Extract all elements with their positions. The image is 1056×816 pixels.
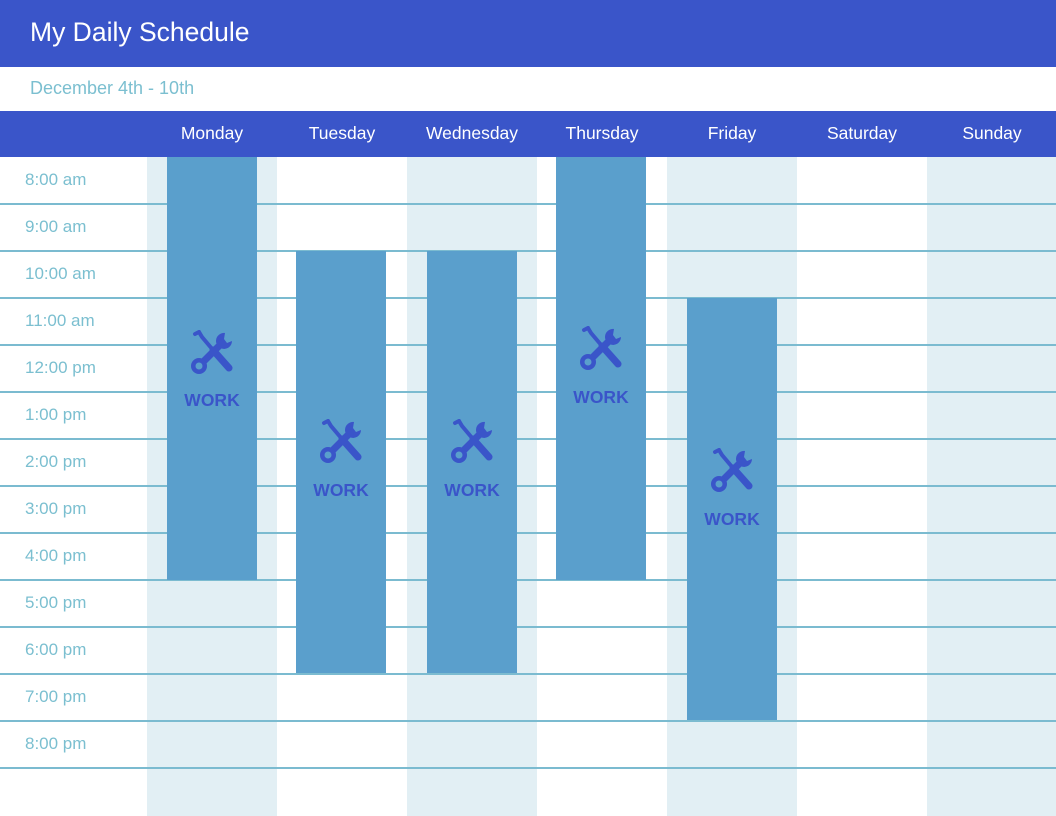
bar: Friday work: WORK xyxy=(704,509,760,529)
icon: tools xyxy=(320,419,362,463)
time labels: 4:00 pm xyxy=(25,546,86,565)
day labels: Wednesday xyxy=(426,123,518,143)
icon: tools xyxy=(580,326,622,370)
day labels xyxy=(181,123,1022,143)
bar: Monday work: WORK xyxy=(184,390,240,410)
time labels: 10:00 am xyxy=(25,264,96,283)
icon: tools xyxy=(191,330,232,374)
bar: Monday work xyxy=(167,157,257,580)
time labels: 2:00 pm xyxy=(25,452,86,471)
time labels: 8:00 pm xyxy=(25,734,86,753)
subtitle: December 4th - 10th xyxy=(30,78,194,98)
bar: Thursday work xyxy=(556,157,646,580)
bar: Wednesday work xyxy=(427,251,517,673)
time labels: 9:00 am xyxy=(25,217,86,236)
time labels: 6:00 pm xyxy=(25,640,86,659)
time labels: 1:00 pm xyxy=(25,405,86,424)
time labels: 3:00 pm xyxy=(25,499,86,518)
day labels: Friday xyxy=(708,123,756,143)
bar: Friday work xyxy=(687,298,777,720)
day labels: Sunday xyxy=(962,123,1022,143)
time labels: 8:00 am xyxy=(25,170,86,189)
icon: tools xyxy=(451,419,492,463)
time labels: 7:00 pm xyxy=(25,687,86,706)
day labels: Tuesday xyxy=(309,123,375,143)
icon: tools xyxy=(711,448,752,492)
title bar xyxy=(0,0,1056,67)
bar: Wednesday work: WORK xyxy=(444,480,500,500)
bar: Tuesday work: WORK xyxy=(313,480,369,500)
bar: Tuesday work xyxy=(296,251,386,673)
time labels: 5:00 pm xyxy=(25,593,86,612)
time labels: 12:00 pm xyxy=(25,358,96,377)
day labels: Saturday xyxy=(827,123,897,143)
day labels: Thursday xyxy=(566,123,638,143)
time labels: 11:00 am xyxy=(25,311,95,330)
time labels xyxy=(25,170,96,753)
bar: Thursday work: WORK xyxy=(573,387,629,407)
title bar: My Daily Schedule xyxy=(30,17,249,47)
day labels: Monday xyxy=(181,123,243,143)
day header bar xyxy=(0,111,1056,157)
